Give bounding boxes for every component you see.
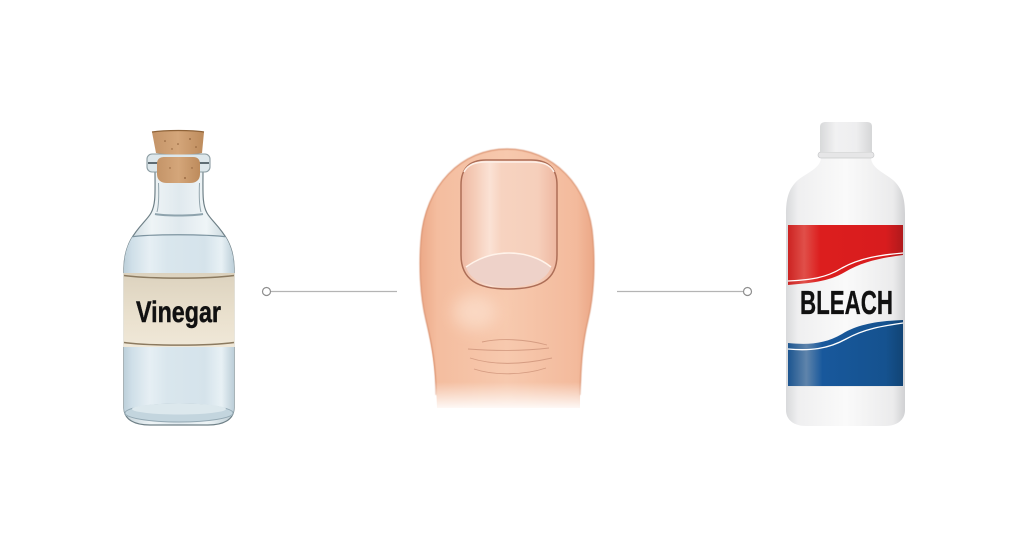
bleach text: BLEACH <box>800 284 893 321</box>
neck flange <box>147 154 210 172</box>
infographic canvas <box>123 122 905 426</box>
bottle base seam <box>787 385 904 387</box>
nail <box>461 160 557 289</box>
nail top edge <box>464 162 554 172</box>
skin fade <box>425 382 590 411</box>
blue wave stripe <box>788 323 903 350</box>
liquid <box>120 183 238 416</box>
bottle body <box>786 157 905 426</box>
icon: bleach bottle <box>786 122 905 426</box>
connector: left line <box>262 288 397 296</box>
lower cork <box>157 157 200 183</box>
toe creases <box>468 340 552 374</box>
icon: toe with nail <box>420 149 594 411</box>
icon: vinegar bottle <box>120 130 238 425</box>
label text: Vinegar <box>136 296 221 329</box>
top cork <box>152 130 204 154</box>
nail lunula <box>466 253 551 287</box>
bottle base <box>125 404 233 422</box>
blue band <box>788 320 903 386</box>
red wave stripe <box>788 253 903 281</box>
toe skin <box>420 149 594 408</box>
knuckle highlight <box>453 294 497 330</box>
red band <box>788 225 903 285</box>
connector: right line <box>617 288 752 296</box>
bottle collar <box>818 152 874 158</box>
vinegar label <box>124 273 234 347</box>
bottle cap <box>820 122 872 152</box>
bottle glass body <box>124 170 234 425</box>
